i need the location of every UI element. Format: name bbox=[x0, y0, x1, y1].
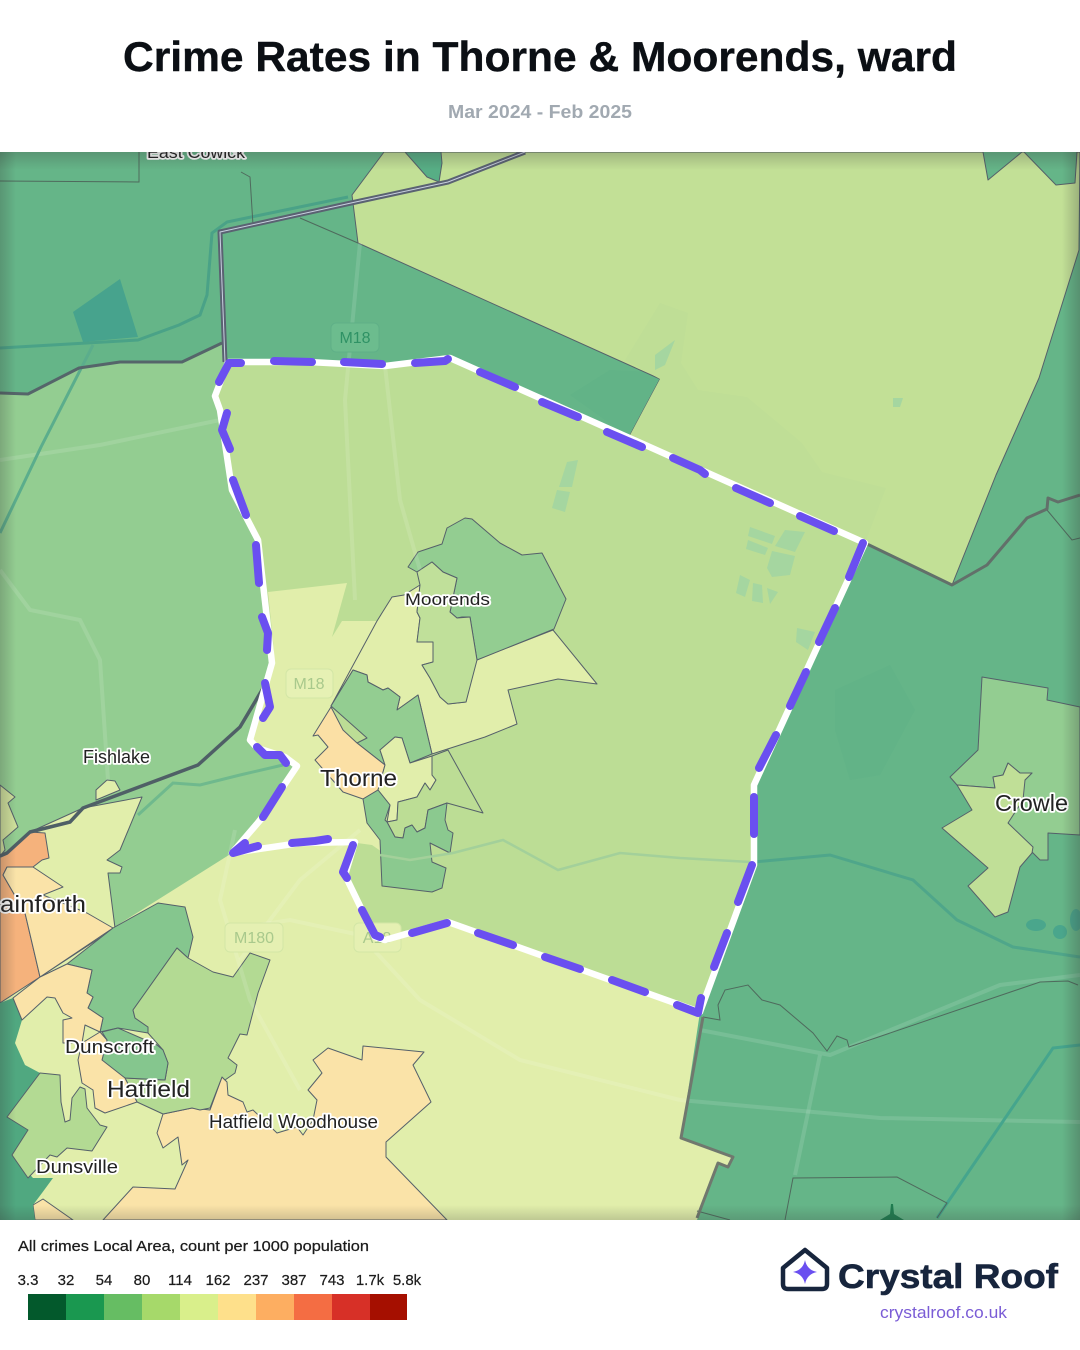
place label: Crowle: Crowle bbox=[995, 790, 1068, 816]
icon: airport plane bbox=[880, 1204, 904, 1220]
region: Hatfield Woodhouse orange bbox=[103, 1046, 447, 1220]
region: Crowle light green bbox=[942, 763, 1033, 917]
ward fields bbox=[552, 340, 903, 650]
legend tick labels: 114 bbox=[168, 1272, 192, 1289]
ward boundary: white line bbox=[215, 358, 865, 1012]
region: east darker farmland patch bbox=[835, 665, 915, 780]
icon: house with star bbox=[783, 1250, 827, 1289]
logo: Crystal Roof bbox=[783, 1250, 1059, 1322]
region: south-west dark strip bbox=[0, 998, 53, 1220]
region: Hatfield orange bbox=[13, 964, 137, 1113]
road badge: M18 north bbox=[331, 323, 379, 352]
legend tick labels: 3.3 bbox=[18, 1272, 38, 1289]
river: east canal bbox=[754, 855, 1080, 957]
legend tick labels: 162 bbox=[205, 1272, 231, 1289]
region: north-east darker patch bbox=[625, 303, 886, 543]
region: Hatfield light green bbox=[125, 948, 270, 1114]
region: Thorne west yellow bbox=[232, 583, 382, 853]
region: Stainforth pale bbox=[3, 797, 142, 977]
motorway M18 north bbox=[220, 152, 525, 362]
region: Thorne south-east light green bbox=[387, 750, 483, 838]
region: Dunsville light green bbox=[7, 1073, 107, 1178]
road badge: M180 bbox=[225, 923, 283, 952]
place label: Hatfield Woodhouse: Hatfield Woodhouse bbox=[209, 1112, 378, 1132]
region: Crowle medium green bbox=[950, 677, 1080, 860]
logo wordmark: Crystal Roof bbox=[838, 1258, 1059, 1296]
boundary: motorway and district lines bbox=[0, 343, 1080, 1218]
legend tick labels: 5.8k bbox=[393, 1272, 422, 1289]
river: north-west canal bbox=[0, 197, 348, 348]
website url: crystalroof.co.uk bbox=[880, 1304, 1008, 1322]
road badge: M18 south bbox=[286, 669, 333, 698]
region: M18 band darker patch bbox=[570, 370, 660, 437]
lakes: east of Crowle bbox=[1026, 909, 1080, 939]
road badge: M18 north: M18 bbox=[339, 330, 371, 347]
legend tick labels: 32 bbox=[58, 1272, 74, 1289]
legend title: All crimes Local Area, count per 1000 population bbox=[18, 1238, 369, 1255]
drain: south-east diagonal bbox=[937, 1045, 1080, 1218]
legend bbox=[18, 1238, 422, 1320]
place label: Hatfield: Hatfield bbox=[107, 1076, 190, 1102]
legend tick labels: 80 bbox=[134, 1272, 150, 1289]
place label: Thorne: Thorne bbox=[320, 765, 397, 791]
region: Thorne south green bbox=[363, 790, 453, 892]
place label: Fishlake: Fishlake bbox=[83, 747, 150, 767]
region: small orange bottom-left bbox=[33, 1199, 73, 1220]
boundary: thin outlines bbox=[0, 152, 1080, 1220]
place label: East Cowick: East Cowick bbox=[147, 143, 246, 162]
road badge: M180: M180 bbox=[234, 930, 274, 947]
region: Stainforth orange bbox=[0, 832, 49, 1003]
legend tick labels bbox=[18, 1272, 422, 1289]
river: diagonal drain bbox=[0, 345, 93, 533]
map base: low-crime green areas bbox=[0, 152, 1080, 1220]
region: south yellow-green bbox=[0, 842, 733, 1220]
legend tick labels: 54 bbox=[96, 1272, 112, 1289]
region: west edge block bbox=[0, 785, 18, 856]
region: west medium green bbox=[0, 343, 297, 1003]
road badge: A18: A18 bbox=[363, 930, 391, 947]
ward boundary: purple dashes bbox=[219, 359, 863, 1013]
river: ward canal bbox=[380, 840, 750, 870]
region: Hatfield medium green bbox=[67, 903, 193, 1033]
region: ward interior bbox=[215, 358, 865, 1012]
choropleth map bbox=[0, 143, 1080, 1220]
region: small top pond area bbox=[405, 152, 442, 182]
lake: north-west bbox=[73, 279, 138, 342]
region: Moorends light green bbox=[417, 562, 477, 704]
region: Dunscroft pocket bbox=[102, 1028, 168, 1080]
legend tick labels: 743 bbox=[319, 1272, 345, 1289]
legend tick labels: 1.7k bbox=[356, 1272, 385, 1289]
place label: Dunsville: Dunsville bbox=[36, 1157, 118, 1177]
place label: Dunscroft: Dunscroft bbox=[65, 1037, 154, 1057]
region: north-east light green bbox=[352, 152, 1080, 585]
legend tick labels: 387 bbox=[281, 1272, 307, 1289]
road badge: M18 south: M18 bbox=[293, 676, 325, 693]
region: Moorends east yellow bbox=[331, 585, 597, 754]
road badge: A18 bbox=[354, 923, 401, 952]
region: Thorne orange centre bbox=[313, 707, 385, 799]
title: Crime Rates in Thorne & Moorends, ward bbox=[123, 33, 957, 80]
region: Moorends medium green bbox=[408, 518, 566, 660]
region: Stainforth pale orange bbox=[3, 867, 113, 977]
region: Thorne east yellow bbox=[378, 737, 436, 822]
place label: Moorends: Moorends bbox=[405, 590, 490, 609]
region: small yellow block above motorway bbox=[96, 780, 120, 800]
river: west canal bbox=[138, 765, 283, 815]
map edge vignette bbox=[0, 152, 1080, 1220]
region: Thorne central green bbox=[331, 670, 432, 765]
subtitle: date range: Mar 2024 - Feb 2025 bbox=[448, 102, 632, 122]
faint roads bbox=[0, 243, 1080, 1175]
place label: Stainforth (cropped): ainforth bbox=[0, 891, 86, 917]
legend tick labels: 237 bbox=[243, 1272, 269, 1289]
legend colour scale bbox=[28, 1294, 407, 1320]
